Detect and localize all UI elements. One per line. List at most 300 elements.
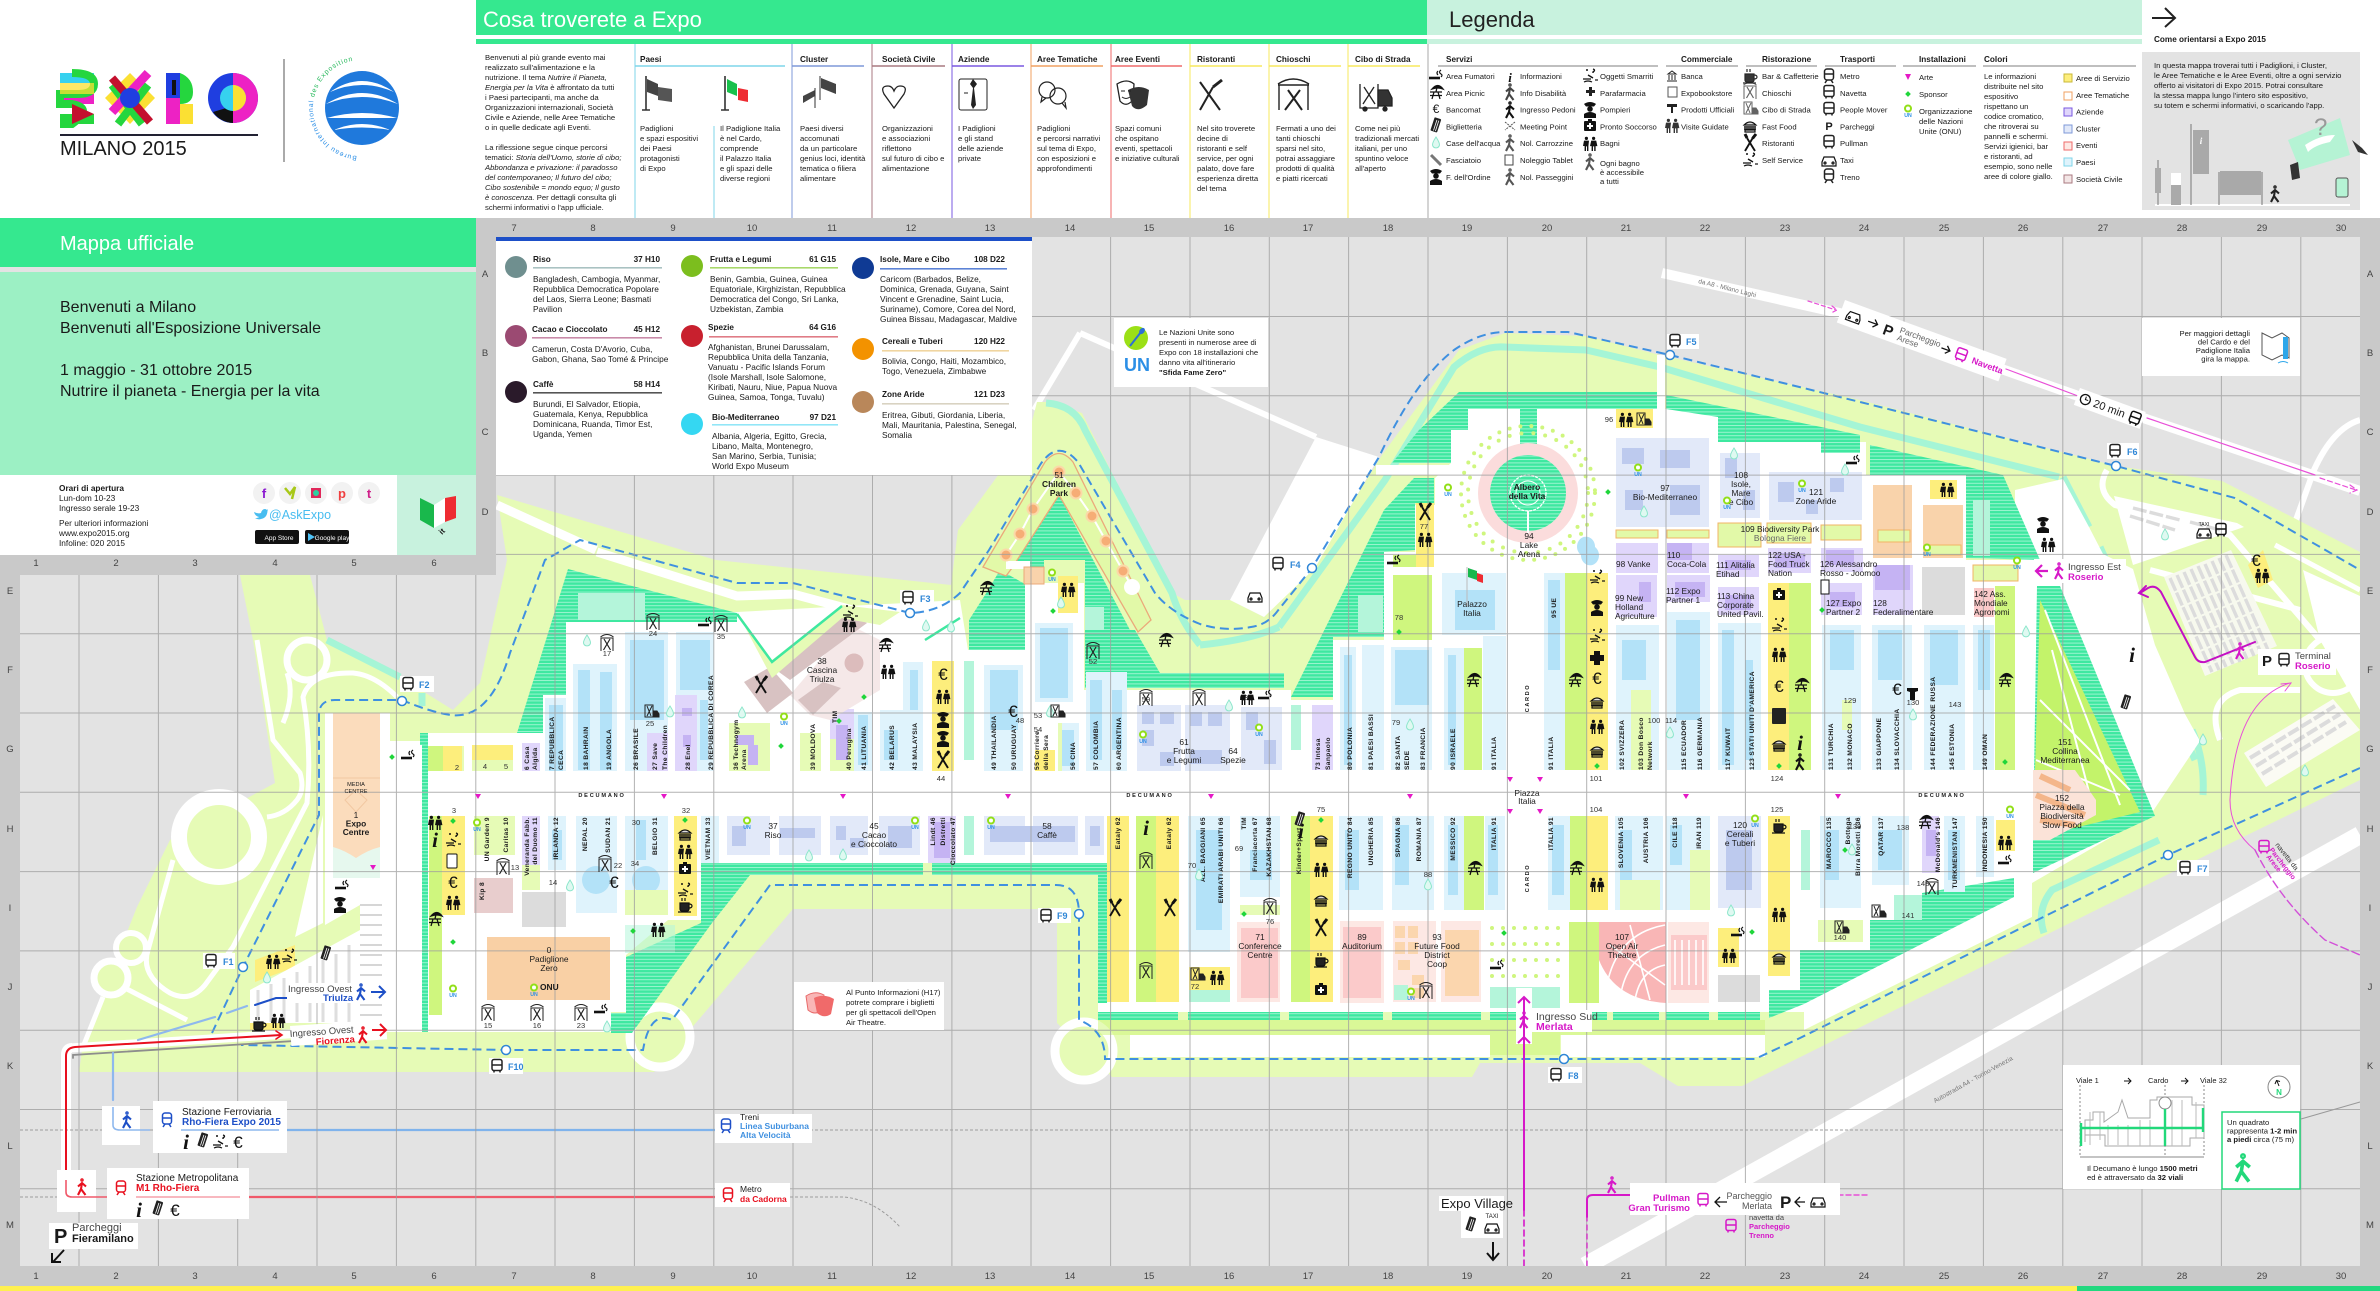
row letters: D [482,507,489,518]
header intro text: Civile e Aziende, nelle Aree Tematiche [485,113,615,122]
Punto Informazioni callout: per gli spettacoli dell'Open [846,1008,936,1017]
legend: Trasporti: Metro [1840,72,1860,81]
bottom grid numbers: 20 [1542,1271,1552,1282]
legend: Commerciale: Prodotti Ufficiali [1681,106,1735,115]
horizontal map labels: 52 [1089,657,1097,666]
Navetta da Parcheggio Arese south label: navetta da [2273,842,2299,872]
United Nations callout: Le Nazioni Unite sono [1159,328,1234,337]
column: Cluster: alimentare [800,174,836,183]
horizontal map labels: Arena [1518,549,1541,559]
Parcheggi Fieramilano [49,1222,138,1262]
Ingresso Est Roserio [2034,559,2126,583]
legend: Servizi: Meeting Point [1520,122,1568,131]
horizontal map labels: United Pavil. [1717,609,1764,619]
service icons column 1: € [1433,102,1440,116]
Pullman Gran Turismo and Parcheggio Merlata: Parcheggio [1726,1191,1772,1201]
north row pavilion labels: 91 ITALIA [1491,736,1498,770]
service icons on the south row: € [609,873,619,892]
Metro callout: Metro [740,1184,762,1194]
horizontal map labels: 76 [1266,917,1274,926]
legend: Trasporti [1822,55,1896,183]
legend: Servizi: Noleggio Tablet [1520,156,1574,165]
north row pavilion labels: 134 SLOVACCHIA [1894,708,1901,770]
horizontal map labels: 97 [1660,483,1670,493]
Punto Informazioni callout: Al Punto Informazioni (H17) [846,988,941,997]
cardo and decumano labels: DECUMANO [1918,793,1966,799]
horizontal map labels: Italia [1463,608,1481,618]
bottom grid numbers: 8 [590,1271,596,1282]
United Nations callout: Expo con 18 installazioni che [1159,348,1258,357]
legend: Colori: Paesi [2076,158,2096,167]
column: Cluster: tematica o filiera [800,164,857,173]
legend: Trasporti: Treno [1840,173,1860,182]
legend: Servizi: Case dell'acqua [1446,139,1501,148]
legend: Colori: Aree di Servizio [2076,74,2130,83]
horizontal map labels: Coop [1427,959,1447,969]
legend: Trasporti: Taxi [1840,156,1854,165]
horizontal map labels: e Legumi [1167,755,1201,765]
cluster Isole, Mare e Cibo: Vincent e Grenadine, Saint Lucia, [880,294,1003,304]
horizontal map labels: 70 [1188,861,1196,870]
illustration: totems, visitor, map and phone: i [2200,136,2203,146]
cluster Riso: 37 H10 [634,255,660,264]
bottom grid numbers: 17 [1303,1271,1313,1282]
bottom grid numbers: 2 [113,1271,119,1282]
horizontal map labels: 48 [1016,716,1024,725]
south row pavilion labels: QATAR 137 [1878,817,1885,856]
bottom grid numbers: 13 [985,1271,995,1282]
cluster Caffe: Dominicana, Ruanda, Timor Est, [533,419,652,429]
bottom grid numbers: 4 [272,1271,278,1282]
Decumano length diagram with compass: Cardo [2148,1076,2168,1085]
south row pavilion labels: MAROCCO 135 [1826,817,1833,869]
legend: Installazioni: delle Nazioni [1919,117,1963,126]
top grid numbers: 24 [1859,223,1869,234]
cluster Cereali e Tuberi: Bolivia, Congo, Haiti, Mozambico, [882,356,1006,366]
horizontal map labels: Caffè [1037,830,1057,840]
cluster Spezie: Vanuatu - Pacific Islands Forum [708,362,825,372]
south row pavilion labels: BELGIO 31 [652,817,659,855]
horizontal map labels: 17 [603,649,611,658]
social icons: t [367,486,372,501]
top grid numbers: 7 [511,223,517,234]
cluster Frutta e Legumi [681,255,846,314]
legend: Colori: e ristoranti, ad [1984,152,2033,161]
Stazione Metropolitana callout [57,1168,249,1222]
bottom grid numbers: 30 [2336,1271,2346,1282]
catering icons [1743,69,1758,166]
column: Aree Tematiche [1031,44,1103,218]
Children Park [983,454,1151,632]
north row pavilion labels: 73 Intesa [1315,738,1322,770]
horizontal map labels: ONU [540,982,559,992]
service icons column 1 [1429,70,1443,185]
legend: Installazioni: Installazioni [1919,55,1966,64]
horizontal map labels: 24 [649,629,657,638]
column: Ristoranti: Nel sito troverete [1197,124,1255,133]
column: Chioschi: potrai assaggiare [1276,154,1335,163]
column: Aree Tematiche: sul tema di Expo, [1037,144,1096,153]
Pullman Gran Turismo and Parcheggio Merlata: Merlata [1742,1201,1772,1211]
column: Cibo di Strada: Cibo di Strada [1355,55,1411,64]
park green base [79,333,2360,1086]
horizontal map labels: e Cibo [1729,497,1753,507]
row letters: I [2369,903,2371,914]
service icons on the central and east blocks: € [2251,551,2261,570]
horizontal map labels: 110 [1667,550,1681,560]
row letters: L [2367,1141,2373,1152]
Per maggiori dettagli callout: del Cardo e del [2198,338,2250,346]
column: Cluster: genius loci, identità [800,154,866,163]
cluster Caffe: Uganda, Yemen [533,429,592,439]
Punto Informazioni callout: Air Theatre. [846,1018,886,1027]
legend: Servizi: Nol. Carrozzine [1520,139,1573,148]
horizontal map labels: Open Air [1606,941,1639,951]
Ingresso Est Roserio: Roserio [2068,572,2104,583]
top grid numbers: 23 [1780,223,1790,234]
Pullman Gran Turismo and Parcheggio Merlata: Gran Turismo [1628,1203,1690,1214]
horizontal map labels: 37 [768,821,778,831]
north row pavilion labels: 19 ANGOLA [606,729,613,770]
top grid numbers: 8 [590,223,596,234]
Treni callout: Alta Velocità [740,1130,791,1140]
cluster Caffe: 58 H14 [634,380,660,389]
Navetta da Parcheggio Arese south label: Parcheggio [2267,847,2296,881]
column: Cluster: Cluster [800,55,829,64]
row letters: D [2367,507,2374,518]
horizontal map labels: 129 [1844,696,1856,705]
top grid numbers: 10 [747,223,757,234]
cluster Bio-Mediterraneo: World Expo Museum [712,461,789,471]
horizontal map labels: e Tuberi [1725,838,1755,848]
south row pavilion labels: IRAN 119 [1696,817,1703,849]
Navetta Arese route label: Parcheggio [1898,325,1943,349]
south row pavilion labels: TURKMENISTAN 147 [1952,817,1959,888]
south row pavilion labels: Cioccolato 47 [950,817,957,865]
horizontal map labels: 78 [1395,613,1403,622]
column: Paesi: di Expo [640,164,666,173]
cluster Isole, Mare e Cibo: 108 D22 [974,255,1005,264]
horizontal map labels: Holland [1615,602,1644,612]
south row pavilion labels: MESSICO 92 [1450,817,1457,861]
cardo and decumano labels: Piazza [1514,788,1540,798]
top grid numbers: 21 [1621,223,1631,234]
Treni callout: Treni [740,1112,759,1122]
legend: Trasporti: Navetta [1840,89,1867,98]
icon: twitter bird [254,509,268,519]
column: Paesi: Paesi [640,55,661,64]
cluster Zone Aride: Mali, Mauritania, Palestina, Senegal, [882,420,1017,430]
north row pavilion labels: The Children [662,725,669,770]
cluster Spezie: 64 G16 [809,323,836,332]
legend: Servizi: Servizi [1446,55,1472,64]
panel: Come orientarsi a Expo 2015: Come orientarsi a Expo 2015 [2154,35,2266,44]
horizontal map labels: Expo [346,818,366,828]
column: Ristoranti: Ristoranti [1197,55,1235,64]
service icons on the central and east blocks: TAXI [2199,522,2209,528]
one-square walking scale box [2222,1112,2300,1189]
horizontal map labels: 111 Alitalia [1716,560,1755,570]
bottom grid numbers: 1 [33,1271,39,1282]
legend: Colori: Le informazioni [1984,72,2036,81]
bottom colour bar [0,1286,2380,1291]
horizontal map labels: 109 Biodiversity Park [1741,524,1820,534]
column: Aree Tematiche: Aree Tematiche [1037,55,1098,64]
bottom grid numbers: 14 [1065,1271,1075,1282]
south row pavilion labels: Kinder+Sport 74 [1296,817,1303,874]
shuttle stop labels: F6 [2127,447,2138,457]
column: Cibo di Strada: tradizionali mercati [1355,134,1419,143]
Stazione Ferroviaria callout: € [233,1133,243,1152]
cluster Isole, Mare e Cibo: Isole, Mare e Cibo [880,255,950,264]
cluster Frutta e Legumi: Benin, Gambia, Guinea, Guinea [710,274,828,284]
social icons [253,482,380,504]
Pullman Gran Turismo and Parcheggio Merlata: Parcheggio [1749,1222,1790,1231]
west parking lot [250,903,382,1023]
horizontal map labels: Triulza [810,674,835,684]
top grid numbers: 12 [906,223,916,234]
Collina Mediterranea and Piazza della Biodiversita [2033,600,2140,840]
legend: Colori [1983,55,2136,184]
legend: Colori: Società Civile [2076,175,2123,184]
shuttle stop labels: F5 [1686,337,1697,347]
legend: Commerciale: Expobookstore [1681,89,1732,98]
row letters: F [7,665,13,676]
column: Aree Tematiche: Padiglioni [1037,124,1071,133]
horizontal map labels: Kip 8 [479,882,486,900]
icon: kiosk [1278,79,1309,110]
legend: Ristorazione: Fast Food [1762,122,1797,131]
cluster Cacao e Cioccolato [505,325,669,364]
top grid numbers: 30 [2336,223,2346,234]
exhibition site white base [422,409,2200,1032]
south row pavilion labels: Veneranda Fabb. [524,817,531,876]
heading: Cosa troverete a Expo: Cosa troverete a Expo [483,7,702,32]
bottom grid numbers [33,558,2346,1282]
south row pavilion labels: KAZAKHSTAN 68 [1266,817,1273,877]
one-square walking scale box: a piedi circa (75 m) [2227,1135,2294,1144]
horizontal map labels: 35 [717,632,725,641]
north row pavilion labels: 144 FEDERAZIONE RUSSA [1930,677,1937,770]
bottom grid numbers: 25 [1939,1271,1949,1282]
bottom grid numbers: 3 [192,558,198,569]
column: Paesi: Il Padiglione Italia [720,124,781,133]
south row pavilion labels: UNGHERIA 85 [1368,817,1375,866]
row letters: G [6,744,14,755]
south row pavilion labels: Franciacorta 67 [1252,817,1259,872]
legend: Servizi: Bagni [1600,139,1620,148]
legend: Ristorazione: Bar & Caffetterie [1762,72,1819,81]
20 min shuttle label [2074,388,2146,429]
cluster Zone Aride: 121 D23 [974,390,1005,399]
legend: Installazioni: Arte [1919,73,1933,82]
service icons column 2 [1505,70,1515,185]
legend: Servizi: Oggetti Smarriti [1600,72,1654,81]
shuttle bus dashed route [212,332,2360,1059]
south row pavilion labels: AZL. BAGGIANI 65 [1200,817,1207,882]
row letters: C [2367,427,2374,438]
horizontal map labels: 44 [937,774,945,783]
cluster Cacao e Cioccolato: Camerun, Costa D'Avorio, Cuba, [532,344,652,354]
column: Chioschi: tanti chioschi [1276,134,1321,143]
legend: Installazioni: Unite (ONU) [1919,127,1962,136]
horizontal map labels: 127 Expo [1826,598,1861,608]
header intro text: nutrizione. Il tema Nutrire il Pianeta, [485,73,607,82]
Punto Informazioni callout [794,982,944,1030]
south row pavilion labels: NEPAL 20 [582,817,589,851]
panel: opening hours and contacts: Ingresso serale 19-23 [59,503,140,513]
horizontal map labels: Albero [1514,482,1540,492]
north row pavilion labels: 42 BELARUS [889,725,896,770]
horizontal map labels: CENTRE [344,789,368,795]
horizontal map labels: Palazzo [1457,599,1487,609]
north row pavilion labels: 82 SANTA [1395,735,1402,770]
cluster Cacao e Cioccolato: Cacao e Cioccolato [532,325,608,334]
bottom grid numbers: 1 [33,558,39,569]
west plaza white base [325,713,424,1032]
horizontal map labels: 54 [1034,725,1042,734]
horizontal map labels: 140 [1834,933,1846,942]
horizontal map labels: 30 [632,818,640,827]
legend: Ristorazione: Self Service [1762,156,1803,165]
header intro text: La riflessione segue cinque percorsi [485,143,608,152]
north row pavilion labels: 6 Casa [524,746,531,770]
horizontal map labels: Zero [540,963,558,973]
cluster Cereali e Tuberi: Cereali e Tuberi [882,337,943,346]
bottom grid numbers: 23 [1780,1271,1790,1282]
horizontal map labels: 112 Expo [1666,586,1701,596]
horizontal map labels: 89 [1357,932,1367,942]
shuttle stops [238,350,2172,1064]
Ingresso Ovest Triulza: Triulza [323,993,354,1004]
cluster Riso: del Laos, Sierra Leone; Basmati [533,294,651,304]
north row pavilion labels: 103 Don Bosco [1638,717,1645,770]
column: Aziende [952,44,1024,218]
horizontal map labels: 16 [533,1021,541,1030]
south row pavilion labels: Eataly 62 [1115,817,1122,849]
cluster Caffe: Burundi, El Salvador, Etiopia, [533,399,640,409]
horizontal map labels: Etihad [1716,569,1740,579]
south row pavilion labels: Birra Moretti 136 [1855,817,1862,876]
service icons on the north row: € [1008,702,1018,721]
cluster Bio-Mediterraneo: Bio-Mediterraneo [712,413,779,422]
Decumano length diagram with compass: N [2276,1088,2282,1097]
north row pavilion labels: 102 SVIZZERA [1619,720,1626,770]
legend: Servizi: F. dell'Ordine [1446,173,1491,182]
top grid numbers: 28 [2177,223,2187,234]
row letters: M [6,1220,14,1231]
north row pavilion labels [524,597,1989,770]
panel: opening hours and contacts: Infoline: 020 2015 [59,538,125,548]
panel: Come orientarsi a Expo 2015: su totem e schermi informativi, o scaricando l'app. [2154,101,2324,110]
horizontal map labels: 114 [1665,716,1677,725]
cluster Spezie: Afghanistan, Brunei Darussalam, [708,342,829,352]
north row pavilion labels: 49 THAILANDIA [991,715,998,770]
top grid numbers: 27 [2098,223,2108,234]
Stazione Ferroviaria callout [102,1101,287,1154]
horizontal map labels: Conference [1238,941,1282,951]
shuttle stop labels: F10 [508,1062,524,1072]
white highway and access roads on grey ground [1034,273,2360,1266]
Decumano length diagram with compass: ed è attraversato da 32 viali [2087,1173,2183,1182]
column: Aziende: e gli stand [958,134,993,143]
cluster Riso: Bangladesh, Cambogia, Myanmar, [533,274,660,284]
legend: Servizi: Area Fumatori [1446,72,1495,81]
legend: Installazioni [1903,55,1976,136]
Metro callout: da Cadorna [740,1194,787,1204]
legend: Ristorazione: Ristoranti [1762,139,1795,148]
bottom grid numbers: 4 [272,558,278,569]
south row pavilion labels: Caritas 10 [503,817,510,853]
column: Paesi: è nel Cardo, [720,134,762,143]
horizontal map labels: 126 Alessandro [1820,559,1878,569]
horizontal map labels: Mediterranea [2040,755,2090,765]
horizontal map labels: District [1424,950,1450,960]
top grid numbers: 11 [827,223,837,234]
column: Aziende: Aziende [958,55,990,64]
Google Play badge: Google play [315,535,350,542]
north row pavilion labels: della Sera [1043,735,1050,770]
row letters: A [2367,269,2374,280]
heading: Legenda [1427,0,2142,44]
shuttle stop labels: F9 [1057,911,1068,921]
north row pavilion labels: 18 BAHRAIN [583,726,590,770]
bottom grid numbers: 5 [351,1271,357,1282]
bottom grid numbers: 15 [1144,1271,1154,1282]
south row pavilion labels [484,817,1989,903]
column: Aree Eventi: Spazi comuni [1115,124,1161,133]
Pullman Gran Turismo and Parcheggio Merlata: Pullman [1653,1193,1690,1204]
horizontal map labels: 125 [1771,805,1783,814]
bottom grid numbers: 24 [1859,1271,1869,1282]
bottom grid numbers: 26 [2018,1271,2028,1282]
north row pavilion labels: 117 KUWAIT [1725,728,1732,770]
top grid numbers: 14 [1065,223,1075,234]
legend: Servizi: Pompieri [1600,106,1631,115]
cluster Spezie: (Isole Marshall, Isole Salomone, [708,372,826,382]
horizontal map labels: 142 Ass. [1974,589,2006,599]
horizontal map labels: 23 [577,1021,585,1030]
horizontal map labels: 2 [455,763,459,772]
south row pavilion labels: REGNO UNITO 84 [1347,817,1354,878]
header intro text: Abbondanza e privazione: il paradosso [484,163,618,172]
legend: Trasporti: Trasporti [1840,55,1875,64]
column: Societa Civile: alimentazione [882,164,929,173]
bottom grid numbers: 6 [431,1271,437,1282]
north row pavilion labels: 91 ITALIA [1548,736,1555,770]
column: Ristoranti: esperienza diretta [1197,174,1259,183]
horizontal map labels: 148 [1917,879,1929,888]
Navetta Arese route label: Navetta [1970,355,2005,376]
north row pavilion labels: 41 LITUANIA [861,726,868,770]
Terminal Roserio [2236,643,2336,675]
top grid numbers: 29 [2257,223,2267,234]
north row pavilion labels: 27 Save [652,743,659,770]
north row pavilion labels: 40 Perugina [846,728,853,770]
bottom grid numbers: 28 [2177,1271,2187,1282]
row letters: K [7,1061,14,1072]
road labels: da A8 - Milano Laghi [1698,278,1757,299]
horizontal map labels: Theatre [1608,950,1637,960]
horizontal map labels: 98 Vanke [1616,559,1651,569]
cluster Isole, Mare e Cibo: Dominica, Grenada, Guyana, Saint [880,284,1009,294]
horizontal map labels: Rosso - Joomoo [1820,568,1881,578]
heading: Cosa troverete a Expo [476,0,1427,44]
column: Paesi: comprende [720,144,758,153]
service icons on the central and east blocks: € [1892,680,1902,699]
legend: Servizi: è accessibile [1600,168,1644,177]
south row pavilion plots [548,816,1994,952]
